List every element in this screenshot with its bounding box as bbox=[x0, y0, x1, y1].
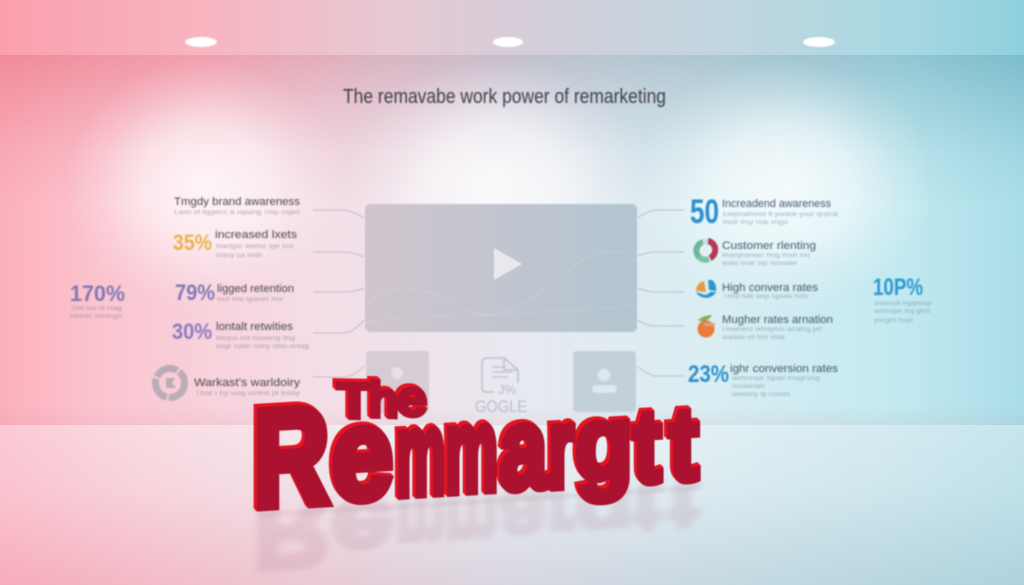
item: brand awareness: Lasn of liggenc & lapang Thip clqed bbox=[174, 210, 300, 216]
floor reflection of 3D wordmark: m bbox=[445, 474, 498, 568]
item: high conversion: Thnd hak lasp sgoalv hsts bbox=[723, 294, 808, 300]
item: high conversion bbox=[722, 282, 819, 300]
item: 30% retwities bbox=[172, 319, 309, 350]
contact shadow under wordmark bbox=[258, 488, 700, 515]
tile: right person icon bbox=[573, 351, 636, 412]
wordmark line: The: h bbox=[368, 372, 399, 429]
item: 30% retwities: 30% bbox=[172, 319, 212, 344]
floor reflection of 3D wordmark: a bbox=[500, 472, 549, 564]
side stat: 10P%: 10P% bbox=[873, 274, 923, 301]
item: 79% retention: hsif hfe lgaser hot bbox=[217, 297, 283, 303]
floor reflection of 3D wordmark bbox=[253, 440, 699, 585]
background: floor bbox=[0, 425, 1024, 585]
wordmark line: Remargtt: t bbox=[633, 389, 662, 506]
item: 50 awareness: Elepnathovd ft yonkle your qrqnal bbox=[723, 212, 838, 218]
side stat: 170%: netotc fovtngh bbox=[70, 314, 122, 320]
item: 23% conversion: 23% bbox=[688, 361, 729, 388]
item: 79% retention bbox=[175, 280, 294, 305]
item: workplace story: Warkast's warldoiry bbox=[194, 377, 301, 389]
item: 35% increased bbox=[173, 229, 298, 259]
wordmark line: Remargtt: m bbox=[396, 386, 446, 522]
item: 35% increased: increased lxets bbox=[215, 229, 298, 241]
item: 23% conversion bbox=[688, 361, 839, 398]
tile: google document bbox=[475, 358, 527, 416]
tile: google document: GOGLE bbox=[475, 397, 527, 416]
wordmark line: The bbox=[337, 370, 427, 430]
item: 30% retwities: xngr vater lolhy shlo onlag bbox=[216, 344, 309, 350]
background: wall bbox=[0, 55, 1024, 427]
item: brand awareness bbox=[174, 196, 301, 216]
ceiling light left bbox=[185, 37, 217, 47]
side stat: 10P%: yorgnt hspt bbox=[874, 318, 913, 324]
side stat: 10P% bbox=[873, 274, 933, 324]
side stat: 170% bbox=[70, 281, 125, 320]
item: 35% increased: hlasy ux lnds bbox=[216, 253, 262, 259]
wordmark line: The: e bbox=[397, 370, 427, 428]
item: 23% conversion: Snxeknato bbox=[732, 384, 766, 390]
wordmark line: Remargtt: m bbox=[445, 383, 498, 518]
item: 79% retention: 79% bbox=[175, 280, 215, 305]
item: 50 awareness: hsdr frsy nok vngo bbox=[723, 220, 789, 226]
icon: circular target bbox=[156, 368, 184, 398]
item: workplace story bbox=[194, 377, 301, 397]
icon: orange and blue chart bbox=[696, 280, 716, 298]
item: 79% retention: ligged retention bbox=[217, 283, 294, 295]
item: 50 awareness bbox=[690, 193, 838, 231]
side stat: 170%: 170% bbox=[70, 281, 125, 306]
item: higher rates: Mugher rates arnation bbox=[722, 314, 833, 326]
item: 35% increased: 35% bbox=[173, 230, 212, 255]
tile: google document: J% bbox=[498, 382, 516, 397]
wordmark line: Remargtt: e bbox=[331, 379, 393, 529]
floor reflection of 3D wordmark: r bbox=[548, 470, 574, 558]
left column stats bbox=[70, 196, 309, 398]
icon: customer ring bbox=[696, 241, 715, 260]
video panel bbox=[365, 204, 637, 332]
floor reflection of 3D wordmark: t bbox=[633, 466, 662, 547]
3D wordmark: The Remargtt bbox=[253, 370, 699, 537]
item: 50 awareness: Increadend awareness bbox=[722, 198, 831, 210]
wordmark line: Remargtt: R bbox=[253, 379, 330, 537]
wordmark line: The: T bbox=[337, 372, 372, 430]
ceiling light center bbox=[493, 37, 523, 47]
wordmark line: Remargtt: r bbox=[548, 383, 574, 512]
floor reflection of 3D wordmark: t bbox=[669, 464, 699, 544]
item: 50 awareness: 50 bbox=[690, 193, 719, 231]
item: higher rates: wanldo vtf fhsr wlak bbox=[721, 335, 786, 341]
title: The remavabe work power of remarketing bbox=[343, 86, 666, 108]
item: higher rates bbox=[721, 314, 833, 341]
tile: left icon bbox=[366, 351, 429, 413]
icon: play button bbox=[494, 248, 522, 280]
item: customer renting bbox=[721, 240, 816, 267]
item: higher rates: Unwherz lxtrsyrvo wrathg prf bbox=[722, 327, 822, 333]
background: ceiling bbox=[0, 0, 1024, 55]
item: 30% retwities: lontalt retwities bbox=[216, 321, 294, 333]
item: brand awareness: Tmgdy brand awareness bbox=[174, 196, 301, 208]
item: 23% conversion: wxebrly ip nsmto bbox=[731, 392, 791, 398]
wordmark line: Remargtt: a bbox=[500, 383, 548, 515]
item: customer renting: Marqnanlac hog fnsh sio bbox=[722, 253, 811, 259]
right column stats bbox=[688, 193, 933, 398]
floor reflection of 3D wordmark: e bbox=[331, 478, 393, 581]
wordmark line: Remargtt: t bbox=[669, 385, 699, 504]
connector lines bbox=[313, 210, 684, 377]
side stat: 10P%: wmrspn frq ghrt bbox=[873, 309, 930, 315]
item: 23% conversion: ighr conversion rates bbox=[730, 363, 839, 375]
wordmark line: Remargtt bbox=[253, 379, 699, 537]
item: customer renting: Customer rlenting bbox=[722, 240, 816, 252]
side stat: 170%: Thd sal nt fsag bbox=[70, 306, 122, 312]
wordmark line: Remargtt: g bbox=[575, 383, 633, 504]
item: 35% increased: Nartgxr welfor lge fsd bbox=[216, 244, 293, 250]
floor reflection of 3D wordmark: g bbox=[575, 472, 633, 555]
ceiling light right bbox=[803, 37, 835, 47]
item: 30% retwities: thopo rof foceing fhg bbox=[216, 336, 295, 342]
icon: apple bbox=[698, 315, 715, 338]
item: high conversion: High convera rates bbox=[722, 282, 819, 294]
floor reflection of 3D wordmark: m bbox=[396, 478, 446, 571]
side stat: 10P%: Swsnull hgqnosp bbox=[874, 301, 933, 307]
item: customer renting: wato lmar txp lsmdate bbox=[721, 261, 798, 267]
item: 23% conversion: wmrxspr fqokf lnsgrvng bbox=[731, 376, 820, 382]
item: workplace story: That I hy uog iorthd pl frday bbox=[195, 391, 300, 397]
